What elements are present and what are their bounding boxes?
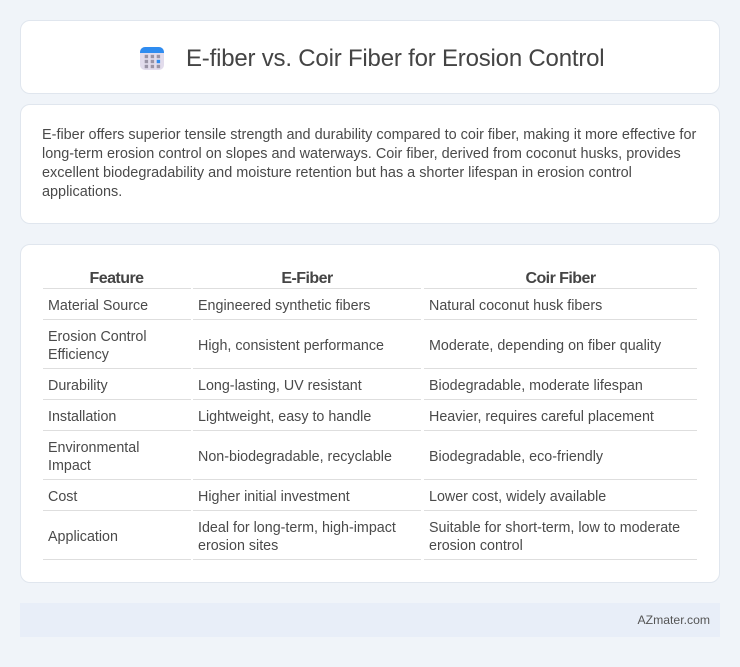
text block: summary paragraph: applications. <box>42 184 122 200</box>
cell: Lower cost, widely available <box>429 489 606 505</box>
cell <box>198 520 396 554</box>
title: E-fiber vs. Coir Fiber for Erosion Control <box>186 45 604 72</box>
row: Erosion Control Efficiency: Erosion Control <box>48 329 147 345</box>
cell: Engineered synthetic fibers <box>198 298 370 314</box>
cell: Suitable for short-term, low to moderate <box>429 520 680 536</box>
text block: summary paragraph: long-term erosion control on slopes and waterways. Coir fiber, derived from coconut husks, provides <box>42 146 681 162</box>
cell: Lightweight, easy to handle <box>198 409 371 425</box>
text block: summary paragraph <box>42 127 696 200</box>
cell: Heavier, requires careful placement <box>429 409 654 425</box>
row: Material Source: Material Source <box>48 298 148 314</box>
cell: Biodegradable, moderate lifespan <box>429 378 643 394</box>
cell: Ideal for long-term, high-impact <box>198 520 396 536</box>
panel: summary <box>20 104 720 224</box>
row: Cost: Cost <box>48 489 77 505</box>
cell: Long-lasting, UV resistant <box>198 378 362 394</box>
cell: Non-biodegradable, recyclable <box>198 449 392 465</box>
icon: calendar <box>140 47 164 70</box>
text block: summary paragraph: E-fiber offers superior tensile strength and durability compared to coir fiber, making it more effective for <box>42 127 696 143</box>
footer bar <box>20 603 720 637</box>
row: Environmental Impact <box>48 440 139 474</box>
text block: summary paragraph: excellent biodegradability and moisture retention but has a shorter lifespan in erosion control <box>42 165 632 181</box>
row: Environmental Impact: Impact <box>48 458 91 474</box>
cell: High, consistent performance <box>198 338 384 354</box>
footer credit: AZmater.com <box>638 613 710 627</box>
cell <box>429 520 680 554</box>
cell: Natural coconut husk fibers <box>429 298 602 314</box>
row: Installation: Installation <box>48 409 116 425</box>
cell: erosion sites <box>198 538 278 554</box>
panel: title card <box>20 20 720 94</box>
row: Environmental Impact: Environmental <box>48 440 139 456</box>
cell: Biodegradable, eco-friendly <box>429 449 603 465</box>
cell: erosion control <box>429 538 523 554</box>
row: Durability: Durability <box>48 378 108 394</box>
column header: Coir Fiber: Coir Fiber <box>525 270 596 287</box>
cell: Moderate, depending on fiber quality <box>429 338 661 354</box>
column header: E-Fiber: E-Fiber <box>281 270 333 287</box>
row: Erosion Control Efficiency <box>48 329 147 363</box>
cell: Higher initial investment <box>198 489 350 505</box>
row: Erosion Control Efficiency: Efficiency <box>48 347 109 363</box>
panel: comparison table <box>20 244 720 583</box>
column header: Feature: Feature <box>90 270 143 287</box>
row: Application: Application <box>48 529 118 545</box>
